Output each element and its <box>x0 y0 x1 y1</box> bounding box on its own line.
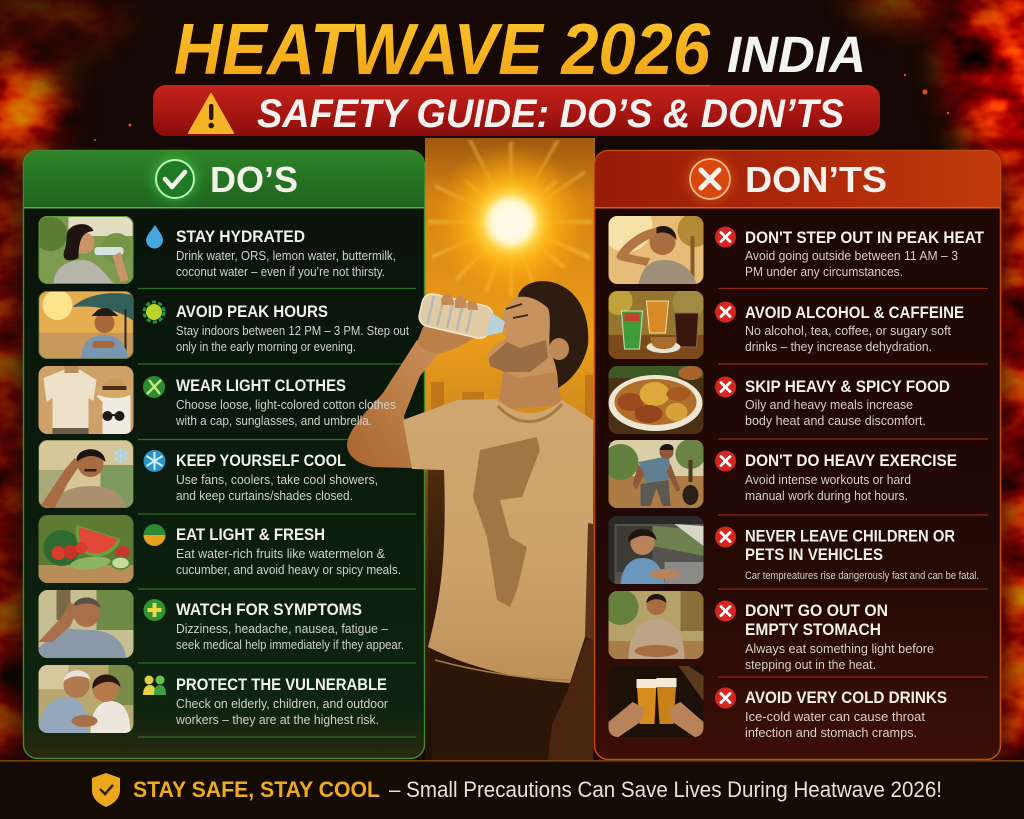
icon: red x <box>715 226 736 248</box>
thumbnail: older man with headache <box>38 590 134 658</box>
center sun backdrop <box>425 138 595 765</box>
row: avoid alcohol and caffeine <box>604 287 964 359</box>
description: only in the early morning or evening. <box>176 340 356 354</box>
heading: STAY HYDRATED <box>176 227 305 246</box>
icon: shield <box>92 773 120 807</box>
heading: EMPTY STOMACH <box>745 620 881 639</box>
description: PM under any circumstances. <box>745 265 903 279</box>
footer banner: – Small Precautions Can Save Lives During Heatwave 2026! <box>389 777 942 802</box>
footer banner <box>0 760 1024 819</box>
description <box>745 710 926 740</box>
description: Avoid intense workouts or hard <box>745 473 911 487</box>
title: HEATWAVE 2026 <box>174 10 711 90</box>
description: Ice-cold water can cause throat <box>745 710 926 724</box>
description: drinks – they increase dehydration. <box>745 340 932 354</box>
thumbnail: woman drinking <box>34 216 134 284</box>
row: never leave children or pets in vehicles <box>608 516 979 584</box>
icon: red x <box>715 376 736 398</box>
description: Oily and heavy meals increase <box>745 398 913 412</box>
face <box>487 293 556 378</box>
heading: don'ts: DON’TS <box>745 159 887 200</box>
icon: red x <box>715 600 736 622</box>
thumbnail: man in heat <box>608 216 704 284</box>
panel: do's background <box>24 150 424 758</box>
description: workers – they are at the highest risk. <box>175 713 379 727</box>
bottle <box>417 292 507 343</box>
description: cucumber, and avoid heavy or spicy meals. <box>176 563 401 577</box>
beard <box>489 340 548 372</box>
description: Check on elderly, children, and outdoor <box>176 697 388 711</box>
row: avoid very cold drinks <box>608 666 947 740</box>
description <box>176 547 401 577</box>
icon: water drop <box>146 225 163 248</box>
panel: don'ts background <box>594 150 1000 760</box>
thumbnail: drinks <box>608 291 704 359</box>
description: Drink water, ORS, lemon water, buttermilk, <box>176 249 396 263</box>
description: Dizziness, headache, nausea, fatigue – <box>176 622 388 636</box>
heading: DON'T STEP OUT IN PEAK HEAT <box>745 228 985 247</box>
icon: bowl <box>144 524 166 546</box>
ear <box>549 338 569 360</box>
icon: crossed tools <box>143 376 165 398</box>
hair <box>518 281 588 388</box>
description: Use fans, coolers, take cool showers, <box>176 473 378 487</box>
shirt <box>403 399 593 683</box>
heading: AVOID ALCOHOL & CAFFEINE <box>745 303 964 322</box>
thumbnail: man cooling down <box>38 440 134 508</box>
description: Eat water-rich fruits like watermelon & <box>176 547 386 561</box>
sweat stain <box>473 437 540 607</box>
description <box>745 249 958 279</box>
neck <box>498 352 562 410</box>
heading: AVOID VERY COLD DRINKS <box>745 688 947 707</box>
description: infection and stomach cramps. <box>745 726 917 740</box>
row: stay hydrated <box>34 216 396 284</box>
description: Always eat something light before <box>745 642 934 656</box>
row: don't do heavy exercise <box>602 439 957 508</box>
heading: EAT LIGHT & FRESH <box>176 525 325 544</box>
heading <box>745 526 955 564</box>
thumbnail: child in car <box>608 516 704 584</box>
heading: DON'T DO HEAVY EXERCISE <box>745 451 957 470</box>
icon: warning triangle <box>189 94 233 133</box>
icon: red x <box>715 526 736 548</box>
pants <box>430 650 590 760</box>
thumbnail: cold beers <box>608 666 704 737</box>
icon: snowflake badge <box>144 450 166 472</box>
icon: x circle <box>688 157 732 201</box>
heading: PROTECT THE VULNERABLE <box>176 675 387 694</box>
row: watch for symptoms <box>38 590 404 658</box>
description <box>745 398 926 428</box>
heading: KEEP YOURSELF COOL <box>176 451 346 470</box>
row: don't step out in peak heat <box>608 216 984 284</box>
description: stepping out in the heat. <box>745 658 876 672</box>
description <box>745 324 951 354</box>
city silhouette <box>431 375 593 420</box>
description <box>745 642 934 672</box>
heading: AVOID PEAK HOURS <box>176 302 328 321</box>
heading <box>745 601 888 639</box>
thumbnail: man cooling down: ❄ <box>112 444 130 469</box>
thumbnail: man with empty stomach <box>602 589 704 659</box>
row: eat light and fresh <box>38 515 401 583</box>
heading: PETS IN VEHICLES <box>745 545 883 564</box>
heading: WATCH FOR SYMPTOMS <box>176 600 362 619</box>
heading: DON'T GO OUT ON <box>745 601 888 620</box>
description: manual work during hot hours. <box>745 489 908 503</box>
description: Stay indoors between 12 PM – 3 PM. Step out <box>176 324 409 338</box>
icon: check circle <box>153 157 197 201</box>
heading: do's: DO’S <box>210 159 298 200</box>
description: Choose loose, light-colored cotton clothes <box>176 398 396 412</box>
thumbnail: fried food plate <box>608 366 704 434</box>
row: don't go out on empty stomach <box>602 589 934 672</box>
thumbnail: light clothes <box>38 366 134 434</box>
heading: SKIP HEAVY & SPICY FOOD <box>745 377 950 396</box>
description: and keep curtains/shades closed. <box>176 489 353 503</box>
heading: NEVER LEAVE CHILDREN OR <box>745 526 955 546</box>
thumbnail: fruits <box>38 515 134 583</box>
description <box>176 473 378 503</box>
description <box>745 473 911 503</box>
description: with a cap, sunglasses, and umbrella. <box>175 414 372 428</box>
thumbnail: man under umbrella <box>38 290 134 359</box>
footer banner: STAY SAFE, STAY COOL <box>133 777 380 802</box>
icon: green sun <box>144 302 164 322</box>
eye and brow <box>506 304 528 318</box>
icon: red x <box>715 302 736 322</box>
icon: red x <box>715 450 736 472</box>
description: body heat and cause discomfort. <box>745 414 926 428</box>
description: No alcohol, tea, coffee, or sugary soft <box>745 324 951 338</box>
fingers <box>441 294 478 310</box>
description: coconut water – even if you’re not thirsty. <box>176 265 385 279</box>
subtitle banner: SAFETY GUIDE: DO’S & DON’TS <box>257 92 844 136</box>
heading: WEAR LIGHT CLOTHES <box>176 376 346 395</box>
thumbnail: elder and child <box>38 665 134 733</box>
description <box>176 249 396 279</box>
row: keep yourself cool <box>38 440 378 508</box>
icon: people <box>143 676 166 695</box>
thumbnail: man working <box>602 439 706 508</box>
description <box>176 622 404 652</box>
description <box>175 398 396 428</box>
title: INDIA <box>727 26 866 83</box>
icon: red x <box>715 688 736 708</box>
description <box>176 324 409 354</box>
description: Avoid going outside between 11 AM – 3 <box>745 249 958 263</box>
row: protect the vulnerable <box>38 665 388 733</box>
description: seek medical help immediately if they appear. <box>176 638 404 652</box>
hand <box>417 324 480 354</box>
row: wear light clothes <box>38 366 396 434</box>
icon: green plus <box>144 599 166 621</box>
row: avoid peak hours <box>38 290 409 359</box>
arm <box>347 340 438 468</box>
row: skip heavy and spicy food <box>608 366 950 434</box>
illustration: man drinking water <box>347 281 593 760</box>
description: Car tempreatures rise dangerously fast and can be fatal. <box>745 570 979 582</box>
description <box>175 697 388 727</box>
